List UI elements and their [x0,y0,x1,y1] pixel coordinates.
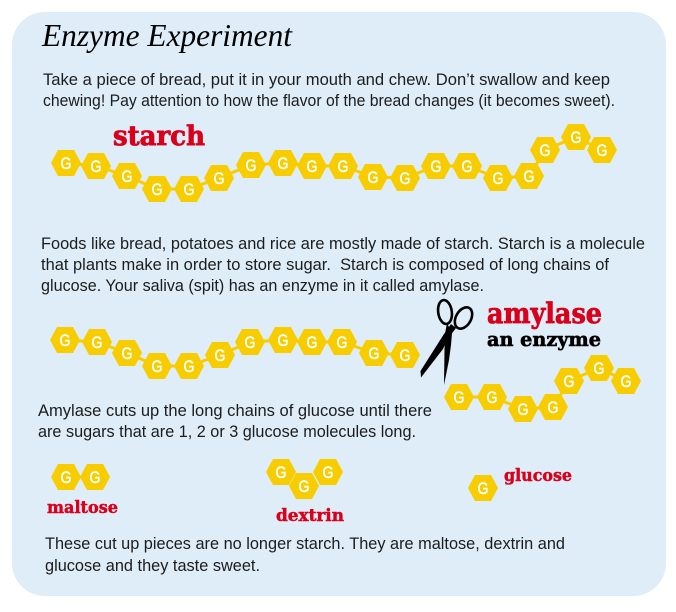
chain: right part after cut: G [518,400,528,419]
chain: left part being cut: G [368,344,380,363]
molecule: glucose: G [478,479,488,498]
subheading: an enzyme: an enzyme [487,327,601,351]
chain: starch glucose chain: G [214,169,224,188]
icon: scissors [420,299,476,385]
chain: left part being cut: G [152,357,162,376]
chain: left part being cut: G [184,357,194,376]
chain: left part being cut: G [306,333,318,352]
chain: left part being cut: G [122,344,132,363]
chain: right part after cut [444,355,641,422]
text block: intro [43,70,615,110]
text block: conclusion [45,534,565,575]
chain: starch glucose chain: G [492,169,504,188]
label: maltose: maltose [47,498,118,518]
chain: starch glucose chain: G [278,154,288,173]
chain: starch glucose chain: G [400,169,410,188]
heading: amylase: amylase [487,297,602,330]
chain: starch glucose chain: G [524,167,534,186]
chain: starch glucose chain: G [122,167,132,186]
chain: starch glucose chain: G [60,154,72,173]
text block: intro: chewing! Pay attention to how the flavor of the bread changes (it becomes sweet). [43,91,615,110]
text block: conclusion: glucose and they taste sweet. [45,556,260,575]
chain: left part being cut: G [92,333,102,352]
label: dextrin: dextrin [276,506,344,526]
label: glucose: glucose [504,466,572,486]
chain: starch glucose chain: G [90,157,102,176]
chain: right part after cut: G [454,388,464,407]
text block: amylase explanation [38,401,432,441]
text block: starch explanation [41,234,645,295]
text block: intro: Take a piece of bread, put it in your mouth and chew. Don’t swallow and keep [43,70,610,89]
molecule: dextrin: G [322,463,334,482]
chain: starch glucose chain: G [596,141,608,160]
chain: starch glucose chain: G [246,156,256,175]
molecule: dextrin: G [298,477,310,496]
chain: left part being cut [50,327,420,379]
chain: starch glucose chain: G [306,157,318,176]
molecule: maltose: G [60,468,72,487]
text block: amylase explanation: are sugars that are 1, 2 or 3 glucose molecules long. [38,422,416,441]
molecule: maltose: G [90,468,100,487]
chain: left part being cut: G [278,331,288,350]
text block: starch explanation: glucose. Your saliva (spit) has an enzyme in it called amylase. [41,276,484,295]
text block: conclusion: These cut up pieces are no longer starch. They are maltose, dextrin and [45,534,565,553]
chain: starch glucose chain: G [338,157,348,176]
chain: right part after cut: G [620,372,632,391]
molecule: dextrin: G [276,463,286,482]
chain: starch glucose chain: G [570,128,582,147]
chain: starch glucose chain: G [430,157,442,176]
molecule: glucose [468,475,498,501]
chain: starch glucose chain: G [540,141,550,160]
molecule: dextrin [266,459,343,499]
chain: left part being cut: G [60,331,70,350]
chain: left part being cut: G [244,333,256,352]
chain: starch glucose chain [51,124,617,202]
chain: starch glucose chain: G [184,180,194,199]
chain: left part being cut: G [336,333,348,352]
chain: left part being cut: G [400,346,410,365]
chain: right part after cut: G [564,372,574,391]
chain: left part being cut: G [214,346,226,365]
chain: starch glucose chain: G [152,180,162,199]
chain: right part after cut: G [594,359,604,378]
chain: right part after cut: G [548,398,558,417]
chain: starch glucose chain: G [462,157,472,176]
text block: starch explanation: that plants make in order to store sugar. Starch is composed of long chains of [41,255,609,274]
molecule: maltose [51,464,110,490]
chain: right part after cut: G [486,388,498,407]
text block: starch explanation: Foods like bread, potatoes and rice are mostly made of starch. Starch is a molecule [41,234,645,253]
chain: starch glucose chain: G [368,168,378,187]
text block: amylase explanation: Amylase cuts up the long chains of glucose until there [38,401,432,420]
heading: starch: starch [113,121,205,152]
title: Enzyme Experiment [41,17,293,53]
